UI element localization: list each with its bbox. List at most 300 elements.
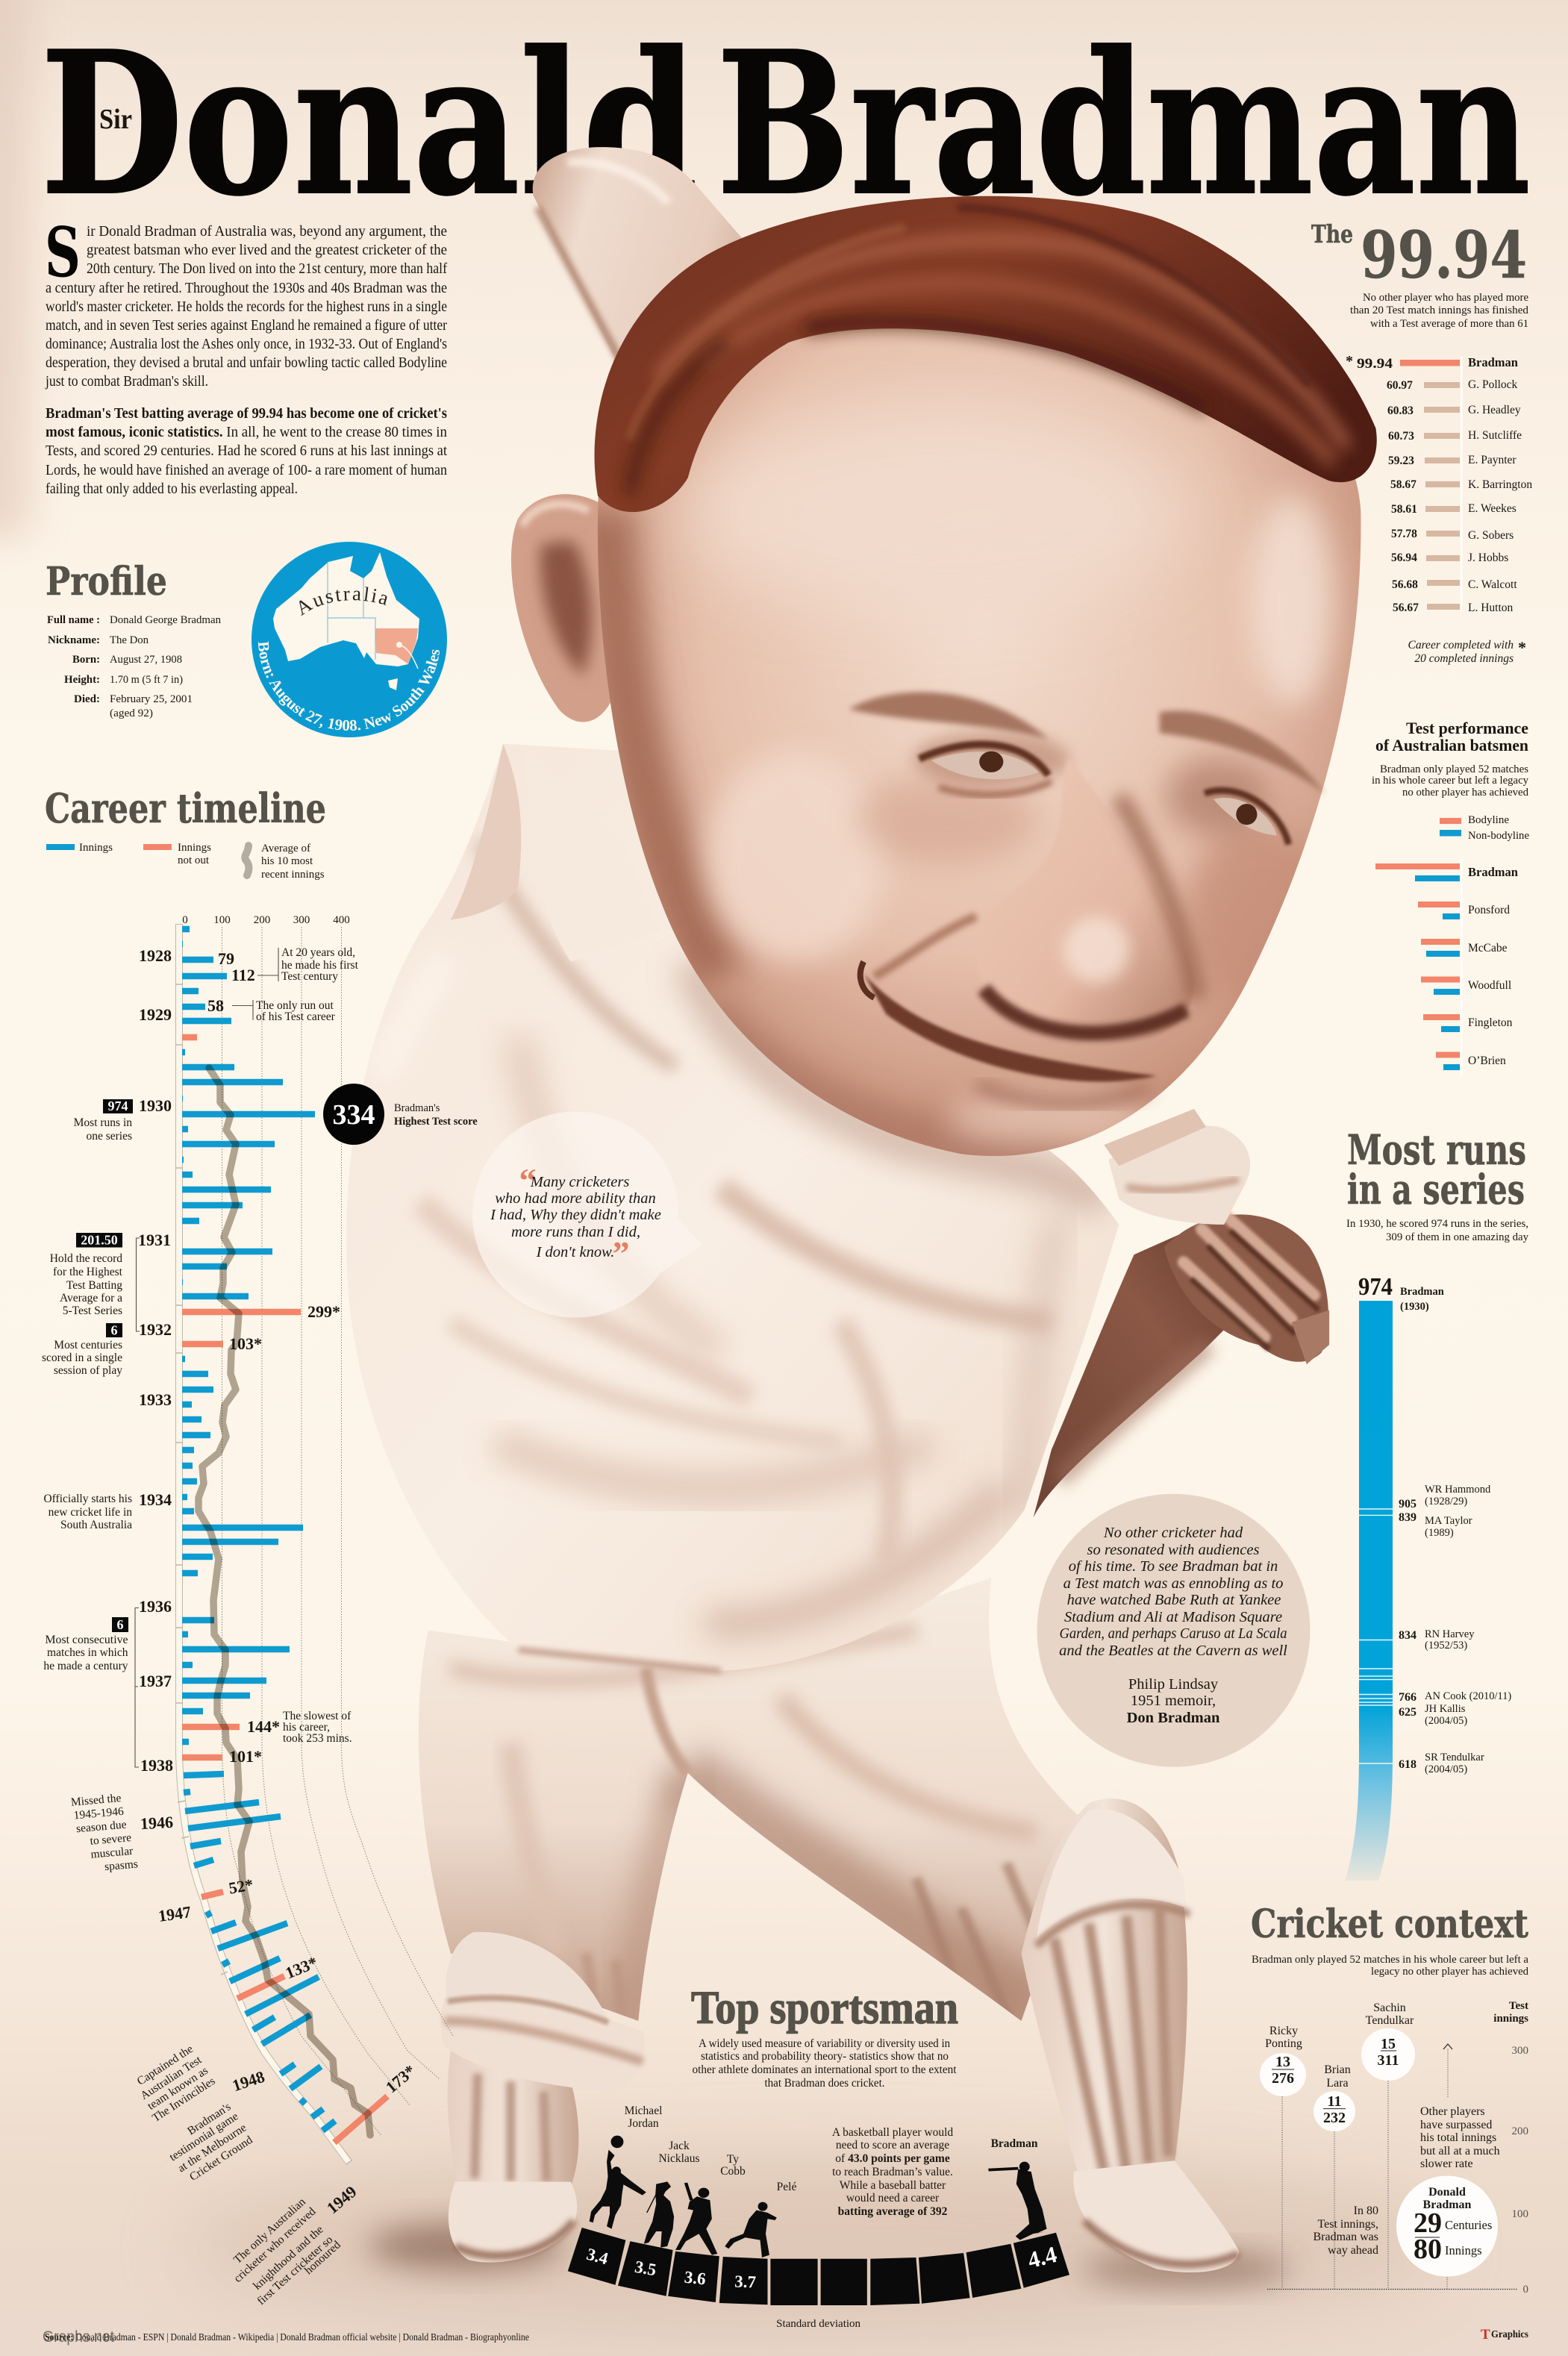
intro text: dominance; Australia lost the Ashes only once, in 1932-33. Out of England's <box>46 336 447 352</box>
heading: most runs <box>1347 1125 1526 1213</box>
bar chart: batting averages: G. Sobers <box>1468 529 1514 542</box>
quote circle: Philip Lindsay: Philip Lindsay <box>1128 1676 1219 1693</box>
ground shadows <box>181 2156 1442 2337</box>
heading: the 99.94: The <box>1311 219 1353 249</box>
chart: standard deviation arch: 3.7 <box>734 2272 756 2291</box>
chart: standard deviation arch: 3.5 <box>634 2257 658 2279</box>
year labels: 1948 <box>230 2067 267 2095</box>
annotations: The Invincibles <box>150 2075 218 2125</box>
axis: Test <box>1509 2000 1528 2012</box>
player: Brian Lara <box>1314 2063 1355 2131</box>
annotations: honoured <box>302 2238 343 2277</box>
panel: most runs in a series <box>1345 1125 1528 1881</box>
year labels: 1946 <box>140 1813 174 1833</box>
player: Ricky Ponting: Ricky <box>1269 2025 1298 2037</box>
year labels: 1931 <box>138 1231 171 1249</box>
annotations: Cricket Ground <box>187 2134 255 2184</box>
series labels: WR Hammond <box>1425 1484 1491 1496</box>
intro text: failing that only added to his everlasting appeal. <box>46 481 298 497</box>
player: Sachin Tendulkar: 15 <box>1381 2036 1396 2052</box>
quote circle: Philip Lindsay: Garden, and perhaps Caruso at La Scala <box>1060 1625 1287 1642</box>
legend: not out <box>178 854 210 866</box>
series labels: (1928/29) <box>1425 1496 1467 1507</box>
axis labels <box>182 914 350 926</box>
profile table: Died: <box>74 693 100 705</box>
bar chart: bodyline: Ponsford <box>1468 904 1510 916</box>
annotations: South Australia <box>60 1519 132 1531</box>
annotation: basketball and baseball: to reach Bradman’s value. <box>832 2166 953 2178</box>
bar chart: batting averages: E. Paynter <box>1468 454 1517 466</box>
axis: 300 <box>1512 2045 1528 2057</box>
map: New South Wales <box>375 628 418 664</box>
player: Donald Bradman: 80 <box>1414 2234 1442 2265</box>
score labels: 133* <box>283 1953 320 1982</box>
ear <box>511 494 619 722</box>
player: Donald Bradman: 29 <box>1414 2207 1442 2239</box>
intro text: desperation, they devised a brutal and unfair bowling tactic called Bodyline <box>46 354 447 371</box>
annotations: Bradman was <box>1313 2231 1378 2243</box>
bar chart: bodyline: Bradman <box>1468 865 1518 879</box>
player: Sachin Tendulkar <box>1361 2002 1415 2081</box>
panel: test performance: no other player has achieved <box>1402 787 1528 799</box>
chart: standard deviation arch: 3.4 <box>584 2245 610 2268</box>
annotations: matches in which <box>47 1646 128 1659</box>
year labels: 1932 <box>139 1320 172 1339</box>
player: Brian Lara: 11 <box>1328 2093 1341 2110</box>
profile table: August 27, 1908 <box>110 654 182 666</box>
head <box>598 248 1361 1156</box>
panel: most runs in a series: In 1930, he scored 974 runs in the series, <box>1346 1218 1528 1230</box>
series labels: (1952/53) <box>1425 1640 1467 1652</box>
icon: silhouette Michael Jordan <box>590 2136 646 2229</box>
intro text: Tests, and scored 29 centuries. Had he scored 6 runs at his last innings at <box>46 443 447 459</box>
score labels <box>207 949 419 2096</box>
series labels: MA Taylor <box>1425 1515 1472 1527</box>
bar chart: batting averages: 58.61 <box>1391 503 1417 516</box>
bar chart: batting averages: 56.68 <box>1392 578 1418 591</box>
annotations: slower rate <box>1420 2157 1473 2170</box>
bar chart: batting averages: 60.83 <box>1387 404 1414 417</box>
annotations: Most consecutive <box>45 1634 128 1646</box>
annotations: team known as <box>146 2064 210 2113</box>
annotations: The slowest of <box>283 1710 352 1722</box>
athlete names: Ty <box>727 2153 739 2166</box>
bar chart: batting averages: C. Walcott <box>1468 578 1517 591</box>
series labels: 625 <box>1399 1706 1416 1719</box>
annotation: basketball and baseball: batting average of 392 <box>838 2205 948 2218</box>
left pad <box>440 1932 645 2263</box>
panel: top sportsman <box>568 1983 1069 2330</box>
annotations: Average for a <box>60 1292 122 1304</box>
profile table: 1.70 m (5 ft 7 in) <box>110 674 183 686</box>
score labels: 52* <box>227 1875 254 1898</box>
heading: the 99.94: 99.94 <box>1361 218 1527 293</box>
series labels: (2004/05) <box>1425 1715 1467 1727</box>
title <box>40 9 1531 240</box>
axis labels: 200 <box>254 914 270 926</box>
bar chart: batting averages: 59.23 <box>1388 454 1414 467</box>
series labels: RN Harvey <box>1425 1628 1475 1640</box>
athlete names: Cobb <box>720 2165 746 2178</box>
bar chart: batting averages: 99.94 <box>1357 356 1393 372</box>
annotations: for the Highest <box>53 1266 123 1278</box>
line: average of 10 innings <box>199 1068 370 2135</box>
year labels: 1949 <box>323 2182 360 2217</box>
player: Donald Bradman: Bradman <box>1423 2199 1472 2211</box>
bar chart: batting averages: 60.73 <box>1388 430 1414 443</box>
intro text <box>45 212 447 497</box>
logo: graphics: T <box>1481 2327 1490 2343</box>
player: Brian Lara: Brian <box>1324 2063 1351 2076</box>
player: Ricky Ponting: Ponting <box>1265 2037 1302 2050</box>
legend: Bodyline <box>1468 814 1509 826</box>
panel: cricket context: legacy no other player has achieved <box>1371 1966 1528 1978</box>
chart: standard deviation arch: Standard deviation <box>776 2318 861 2330</box>
intro text: most famous, iconic statistics. In all, he went to the crease 80 times in <box>46 424 447 440</box>
quote circle: Philip Lindsay: Stadium and Ali at Madison Square <box>1064 1609 1282 1625</box>
bar chart: batting averages: G. Pollock <box>1468 378 1518 391</box>
footnote: 20 completed innings <box>1414 652 1514 665</box>
quote bubble: many cricketers: ” <box>612 1234 630 1272</box>
annotations: of his Test career <box>256 1010 336 1023</box>
right pad <box>1021 1799 1239 2272</box>
bar chart: bodyline <box>1375 859 1518 1076</box>
player: Donald Bradman <box>1396 2176 1498 2276</box>
callout: highest score 334: Highest Test score <box>394 1116 478 1128</box>
annotations: cricketer who received <box>231 2205 319 2285</box>
intro text: 20th century. The Don lived on into the 21st century, more than half <box>87 260 447 277</box>
quote circle: Philip Lindsay: Don Bradman <box>1127 1710 1220 1726</box>
quote bubble: many cricketers <box>472 1112 702 1318</box>
profile table: Donald George Bradman <box>110 614 221 626</box>
annotations: Bradman's <box>185 2100 233 2137</box>
quote circle: Philip Lindsay: so resonated with audiences <box>1087 1542 1260 1558</box>
quote circle: Philip Lindsay: 1951 memoir, <box>1131 1693 1216 1709</box>
series labels: Bradman <box>1400 1286 1444 1298</box>
bar chart: batting averages: 56.94 <box>1391 551 1417 564</box>
annotations: at the Melbourne <box>175 2121 249 2175</box>
map disc: Australia: Born: August 27, 1908. New South Wales <box>258 641 440 731</box>
legend: Innings <box>178 842 211 854</box>
quote bubble: many cricketers: “ <box>519 1161 536 1199</box>
axis: 0 <box>1522 2284 1528 2296</box>
annotations: Hold the record <box>50 1252 122 1265</box>
score labels: 58 <box>207 996 224 1015</box>
legend: Innings <box>79 842 113 854</box>
panel: test performance: Bradman only played 52 matches <box>1380 763 1528 775</box>
heading: test performance: of Australian batsmen <box>1375 736 1528 754</box>
axis: 200 <box>1512 2125 1528 2137</box>
year labels: 1930 <box>139 1096 172 1115</box>
quote circle: Philip Lindsay: of his time. To see Bradman bat in <box>1069 1558 1278 1575</box>
panel: the 99.94: than 20 Test match innings has finished <box>1350 304 1528 316</box>
annotations: he made a century <box>43 1660 128 1672</box>
callout: highest score 334: Bradman's <box>394 1102 440 1114</box>
profile table: Nickname: <box>48 634 100 646</box>
logo: graphics <box>1481 2327 1528 2343</box>
year labels: 1929 <box>139 1005 172 1024</box>
series labels: SR Tendulkar <box>1425 1752 1484 1763</box>
heading: career timeline: Career timeline <box>45 784 326 832</box>
profile table: February 25, 2001 <box>110 693 193 705</box>
player: Ricky Ponting: 276 <box>1272 2070 1294 2087</box>
bar chart: batting averages: J. Hobbs <box>1468 551 1508 564</box>
score labels: 79 <box>218 949 234 968</box>
panel: the 99.94: No other player who has played more <box>1363 292 1528 304</box>
annotations: he made his first <box>281 959 359 972</box>
chart: standard deviation arch: 3.6 <box>684 2268 707 2288</box>
panel: cricket context <box>1251 1902 1528 2343</box>
annotations: 201.50 <box>81 1233 118 1248</box>
annotations <box>1313 2105 1500 2257</box>
annotations: scored in a single <box>42 1352 122 1364</box>
annotations: muscular <box>90 1845 134 1861</box>
series labels: (1930) <box>1400 1301 1429 1313</box>
panel: the 99.94: with a Test average of more than 61 <box>1370 318 1528 330</box>
icon: silhouette Jack Nicklaus <box>644 2181 674 2248</box>
annotations: his total innings <box>1420 2131 1496 2144</box>
series labels: 766 <box>1399 1691 1416 1704</box>
athlete names: Michael <box>625 2105 662 2117</box>
player: Sachin Tendulkar: 311 <box>1378 2052 1399 2069</box>
watermark: Graphs.net <box>43 2328 114 2346</box>
callout: highest score 334: 334 <box>333 1099 375 1131</box>
map disc: Australia <box>252 542 447 737</box>
series labels <box>1358 1273 1511 1775</box>
series labels: (1989) <box>1425 1527 1454 1539</box>
drop cap: S <box>45 212 81 293</box>
bar: series runs <box>1345 1301 1393 1881</box>
annotations: 974 <box>107 1099 128 1113</box>
score labels: 103* <box>229 1334 262 1353</box>
heading: test performance <box>1375 719 1528 754</box>
trousers <box>419 1578 1089 2021</box>
bar chart: batting averages: 56.67 <box>1393 602 1419 614</box>
bar chart: batting averages: 58.67 <box>1390 478 1416 491</box>
series labels: JH Kallis <box>1425 1703 1466 1715</box>
annotation: basketball and baseball: While a baseball batter <box>840 2179 946 2192</box>
annotations: 6 <box>110 1322 118 1337</box>
year labels <box>138 946 360 2217</box>
annotations: 6 <box>116 1617 124 1632</box>
face features <box>849 692 1325 1103</box>
player: Sachin Tendulkar: Sachin <box>1373 2002 1406 2014</box>
hair <box>595 196 1377 512</box>
footnote: Career completed with <box>1408 639 1514 652</box>
panel: top sportsman: other athlete dominates an international sport to the extent <box>693 2063 957 2076</box>
chart: standard deviation arch: 4.4 <box>1025 2241 1060 2273</box>
quote bubble: many cricketers: I had, Why they didn't make <box>490 1207 661 1223</box>
panel: top sportsman: statistics and probability theory- statistics show that no <box>701 2050 949 2063</box>
annotations <box>42 946 359 2307</box>
map: Australia outline <box>273 552 419 666</box>
annotations: At 20 years old, <box>281 946 355 959</box>
annotation: basketball and baseball: A basketball player would <box>832 2126 953 2139</box>
year labels: 1928 <box>139 946 172 965</box>
athlete names: Nicklaus <box>658 2152 700 2165</box>
logo: graphics: Graphics <box>1491 2328 1528 2340</box>
heading: the 99.94 <box>1311 218 1527 293</box>
bar chart: batting averages: 60.97 <box>1387 379 1413 392</box>
panel: top sportsman: that Bradman does cricket. <box>764 2077 885 2090</box>
annotations: way ahead <box>1328 2244 1378 2257</box>
panel: test performance <box>1372 719 1529 1076</box>
panel: career timeline <box>42 784 478 2307</box>
annotations: spasms <box>104 1857 138 1873</box>
annotations: Australian Test <box>138 2053 204 2102</box>
axis: innings <box>1493 2013 1528 2025</box>
icon: silhouette Pelé <box>725 2202 777 2257</box>
series labels: (2004/05) <box>1425 1763 1467 1775</box>
annotation: basketball and baseball: would need a career <box>846 2192 940 2205</box>
panel: profile <box>46 559 221 719</box>
player: Brian Lara: Lara <box>1326 2077 1349 2090</box>
player: Brian Lara: 232 <box>1323 2110 1346 2126</box>
quote circle: Philip Lindsay: have watched Babe Ruth at Yankee <box>1067 1592 1281 1608</box>
annotations: first Test cricketer so <box>254 2233 335 2307</box>
annotations: Other players <box>1420 2105 1485 2118</box>
athlete names: Bradman <box>991 2137 1038 2150</box>
heading: top sportsman: Top sportsman <box>691 1983 958 2034</box>
footnote <box>1408 638 1526 665</box>
player: Ricky Ponting <box>1260 2025 1306 2096</box>
axis rail <box>179 924 349 2163</box>
bar chart: bodyline: McCabe <box>1468 942 1508 954</box>
score labels: 101* <box>229 1747 262 1766</box>
annotations: 5-Test Series <box>63 1304 122 1317</box>
year labels: 1947 <box>157 1902 192 1925</box>
annotations: Test century <box>281 970 338 983</box>
athlete names: Jack <box>669 2140 690 2152</box>
source line: Source: Donald Bradman - ESPN | Donald Bradman - Wikipedia | Donald Bradman official website | Donald Bradman - Biographyonline <box>45 2331 529 2343</box>
quote circle: Philip Lindsay: and the Beatles at the Cavern as well <box>1059 1643 1287 1659</box>
series labels: 839 <box>1399 1511 1416 1524</box>
legend: Average of <box>261 843 310 854</box>
bar chart: bodyline: O’Brien <box>1468 1054 1506 1067</box>
year labels: 1934 <box>139 1490 172 1509</box>
annotations: have surpassed <box>1420 2119 1492 2131</box>
annotation: basketball and baseball: need to score an average <box>836 2139 949 2152</box>
quote bubble: many cricketers: I don't know. <box>536 1244 614 1260</box>
bar chart: bodyline: Fingleton <box>1468 1016 1513 1029</box>
title: Sir <box>99 104 132 135</box>
shirt <box>346 744 1119 1671</box>
bar chart: batting averages: G. Headley <box>1468 404 1521 416</box>
player: Ricky Ponting: 13 <box>1275 2054 1290 2070</box>
annotations: one series <box>86 1130 132 1143</box>
year labels: 1933 <box>139 1390 172 1409</box>
legend: recent innings <box>261 869 325 881</box>
quote circle: Philip Lindsay: No other cricketer had <box>1103 1525 1243 1541</box>
intro text: just to combat Bradman's skill. <box>45 373 208 390</box>
bat blade <box>533 147 796 421</box>
legend <box>46 842 325 881</box>
athlete names: Pelé <box>777 2181 796 2193</box>
intro text: world's master cricketer. He holds the records for the highest runs in a single <box>46 299 447 315</box>
bar chart: batting averages: 57.78 <box>1391 528 1417 540</box>
bar chart: batting averages: E. Weekes <box>1468 502 1517 515</box>
axis: 100 <box>1512 2208 1528 2220</box>
footnote: * <box>1518 638 1526 657</box>
annotations: new cricket life in <box>49 1506 132 1519</box>
intro text: a century after he retired. Throughout the 1930s and 40s Bradman was the <box>46 280 447 296</box>
icon: silhouette Bradman <box>988 2162 1047 2240</box>
panel: the 99.94 <box>1311 218 1532 665</box>
legend <box>1440 814 1529 842</box>
annotations: Test Batting <box>66 1279 122 1292</box>
panel: test performance: in his whole career but left a legacy <box>1372 775 1528 787</box>
annotations: season due <box>75 1818 127 1835</box>
callout: highest score 334 <box>323 1084 478 1145</box>
bar chart: batting averages: K. Barrington <box>1468 478 1532 491</box>
year labels: 1938 <box>140 1756 173 1775</box>
axis labels: 0 <box>182 914 188 926</box>
player: Donald Bradman: Donald <box>1428 2186 1466 2199</box>
annotation: basketball and baseball <box>832 2126 953 2218</box>
annotations: to severe <box>90 1831 132 1848</box>
year labels: 1936 <box>139 1597 172 1616</box>
profile table: Full name : <box>47 614 100 626</box>
series labels: AN Cook (2010/11) <box>1425 1690 1511 1702</box>
bar chart: batting averages: * <box>1346 353 1353 369</box>
axis labels: 400 <box>333 914 350 926</box>
intro text: greatest batsman who ever lived and the greatest cricketer of the <box>87 242 447 258</box>
bars: innings <box>182 929 335 2131</box>
profile table: The Don <box>110 634 149 646</box>
quote circle: Philip Lindsay <box>1037 1494 1311 1767</box>
annotations: Officially starts his <box>43 1493 132 1505</box>
annotations: Test innings, <box>1317 2218 1378 2231</box>
intro text: Lords, he would have finished an average of 100- a rare moment of human <box>46 462 447 478</box>
annotations: his career, <box>283 1721 330 1734</box>
series labels: 974 <box>1358 1273 1393 1301</box>
profile table <box>47 614 221 719</box>
bar chart: batting averages <box>1346 353 1532 614</box>
intro text: Bradman's Test batting average of 99.94 has become one of cricket's <box>46 405 447 422</box>
year labels: 1937 <box>139 1672 172 1690</box>
player: Sachin Tendulkar: Tendulkar <box>1366 2014 1414 2027</box>
intro text: ir Donald Bradman of Australia was, beyond any argument, the <box>87 223 447 240</box>
athlete names <box>625 2105 1038 2193</box>
profile table: Height: <box>64 674 100 686</box>
axis <box>1267 2000 1528 2296</box>
annotations: Captained the <box>135 2043 196 2088</box>
panel: most runs in a series: 309 of them in one amazing day <box>1386 1231 1528 1243</box>
annotations: In 80 <box>1354 2205 1378 2217</box>
annotation: basketball and baseball: of 43.0 points per game <box>835 2152 950 2165</box>
chart: standard deviation arch <box>568 2228 1069 2330</box>
annotations: knighthood and the <box>251 2223 326 2293</box>
series labels: 905 <box>1399 1498 1416 1510</box>
annotations: Most runs in <box>74 1116 132 1129</box>
score labels: 299* <box>307 1302 340 1321</box>
profile table: Born: <box>72 654 100 666</box>
bar chart: batting averages: L. Hutton <box>1468 602 1514 614</box>
annotations: Missed the <box>70 1792 122 1809</box>
bar chart: batting averages: H. Sutcliffe <box>1468 429 1522 442</box>
grid lines <box>222 927 453 2135</box>
player: Donald Bradman: Innings <box>1445 2243 1482 2257</box>
title: Donald <box>40 9 698 240</box>
annotations: The only run out <box>256 999 334 1012</box>
panel: cricket context: Bradman only played 52 matches in his whole career but left a <box>1252 1954 1528 1966</box>
bars: not out <box>182 1037 387 2143</box>
bar chart: bodyline: Woodfull <box>1468 979 1511 992</box>
quote circle: Philip Lindsay: a Test match was as ennobling as to <box>1063 1575 1283 1592</box>
axis labels: 100 <box>213 914 231 926</box>
annotations: testimonial game <box>167 2110 241 2164</box>
bar chart: batting averages: Bradman <box>1468 355 1518 369</box>
